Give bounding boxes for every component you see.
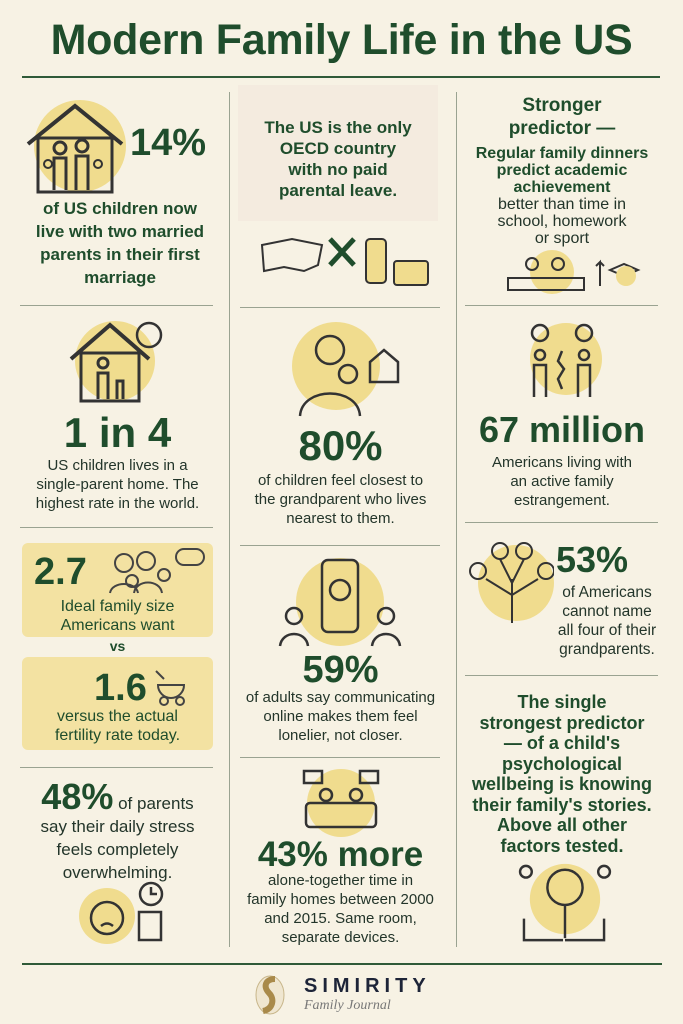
panel: family stories bbox=[472, 692, 652, 942]
text: highest rate in the world. bbox=[36, 495, 199, 512]
stat: 67 million bbox=[479, 409, 645, 450]
heading bbox=[509, 95, 616, 139]
text bbox=[264, 118, 412, 200]
text: alone-together time in bbox=[268, 872, 413, 889]
panel: 48% bbox=[40, 776, 194, 944]
panel: 80% bbox=[254, 322, 426, 527]
icon: grandparent bbox=[292, 322, 400, 416]
stat and text: say their daily stress bbox=[40, 817, 194, 836]
stat: 14% bbox=[130, 122, 206, 164]
stat and text: feels completely bbox=[57, 840, 178, 859]
text bbox=[476, 145, 648, 247]
icon: family faces bbox=[109, 548, 205, 594]
heading: predictor — bbox=[509, 118, 615, 139]
text: Americans living with bbox=[492, 454, 632, 471]
icon: house family bbox=[26, 100, 126, 194]
panel: 1.6 bbox=[22, 657, 213, 750]
stat: 59% bbox=[302, 649, 379, 691]
text: or sport bbox=[535, 230, 589, 247]
text: online makes them feel bbox=[263, 708, 418, 725]
title: Modern Family Life in the US bbox=[51, 16, 632, 64]
stat: 43% more bbox=[258, 835, 423, 874]
panel: 53% bbox=[469, 539, 656, 658]
text: Above all other bbox=[497, 815, 627, 835]
text bbox=[492, 454, 632, 509]
text: the grandparent who lives bbox=[255, 491, 426, 508]
text bbox=[247, 872, 434, 946]
text bbox=[246, 689, 435, 744]
text bbox=[558, 584, 656, 658]
panel: family dinners bbox=[476, 95, 648, 294]
text: single-parent home. The bbox=[36, 476, 199, 493]
icon: phone sad bbox=[278, 558, 402, 646]
stat: 53% bbox=[556, 539, 628, 580]
text: better than time in bbox=[498, 196, 626, 213]
stat and text bbox=[40, 776, 194, 882]
panel: 43% more bbox=[247, 769, 434, 946]
panel: 2.7 bbox=[22, 543, 213, 637]
icon: sofa devices bbox=[302, 769, 380, 837]
subtitle: Family Journal bbox=[304, 998, 391, 1013]
text: — of a child's bbox=[504, 733, 620, 753]
text bbox=[36, 457, 199, 512]
text: The US is the only bbox=[264, 118, 412, 137]
stat and text: 48% of parents bbox=[41, 776, 194, 817]
text bbox=[36, 199, 204, 287]
icon: estrangement bbox=[530, 323, 602, 397]
icon: S logo bbox=[256, 976, 284, 1014]
text: cannot name bbox=[562, 603, 652, 620]
text bbox=[55, 708, 180, 744]
text: grandparents. bbox=[559, 641, 655, 658]
text: marriage bbox=[84, 268, 156, 287]
text: factors tested. bbox=[500, 836, 624, 856]
text bbox=[254, 472, 426, 527]
text: of adults say communicating bbox=[246, 689, 435, 706]
text: and 2015. Same room, bbox=[264, 910, 417, 927]
text: nearest to them. bbox=[286, 510, 395, 527]
text bbox=[472, 692, 652, 856]
stat: 80% bbox=[298, 422, 383, 469]
text: fertility rate today. bbox=[55, 727, 180, 744]
text: school, homework bbox=[498, 213, 626, 230]
text bbox=[60, 598, 174, 634]
stat: 1 in 4 bbox=[64, 409, 171, 456]
vs: vs bbox=[110, 638, 125, 654]
text: Americans want bbox=[61, 617, 174, 634]
text: Ideal family size bbox=[61, 598, 174, 615]
text: of Americans bbox=[562, 584, 652, 601]
text: parental leave. bbox=[279, 181, 397, 200]
text: Regular family dinners bbox=[476, 145, 648, 162]
text: of US children now bbox=[43, 199, 197, 218]
brand name: SIMIRITY bbox=[304, 975, 431, 997]
text: psychological bbox=[502, 754, 622, 774]
panel: 1 in 4 bbox=[36, 321, 199, 512]
stat: 2.7 bbox=[34, 551, 87, 593]
text: of children feel closest to bbox=[258, 472, 423, 489]
icon: stressed face bbox=[79, 882, 164, 944]
text: strongest predictor bbox=[479, 712, 645, 732]
stat: 1.6 bbox=[94, 667, 147, 709]
icon: book tree bbox=[518, 864, 612, 942]
text: US children lives in a bbox=[47, 457, 188, 474]
text: estrangement. bbox=[514, 492, 610, 509]
text: all four of their bbox=[558, 622, 656, 639]
text: with no paid bbox=[288, 160, 388, 179]
panel: 67 million bbox=[479, 323, 645, 509]
text: achievement bbox=[514, 179, 610, 196]
text: OECD country bbox=[280, 139, 396, 158]
text: an active family bbox=[510, 473, 614, 490]
footer: logo bbox=[256, 975, 431, 1014]
panel: 14% bbox=[26, 100, 206, 287]
stat and text: overwhelming. bbox=[63, 863, 172, 882]
panel: 59% bbox=[246, 558, 435, 744]
icon: stroller bbox=[155, 670, 185, 706]
icon: family tree bbox=[469, 542, 554, 623]
icon: map x bottle briefcase bbox=[260, 237, 429, 286]
text: wellbeing is knowing bbox=[472, 774, 652, 794]
text: versus the actual bbox=[57, 708, 178, 725]
text: lonelier, not closer. bbox=[278, 727, 403, 744]
text: The single bbox=[517, 692, 606, 712]
text: predict academic bbox=[497, 162, 627, 179]
text: separate devices. bbox=[282, 929, 399, 946]
text: parents in their first bbox=[40, 245, 200, 264]
text: live with two married bbox=[36, 222, 204, 241]
panel: paid leave bbox=[260, 118, 429, 286]
heading: Stronger bbox=[522, 95, 602, 116]
text: family homes between 2000 bbox=[247, 891, 434, 908]
text: their family's stories. bbox=[472, 794, 652, 814]
icon: dinner table bbox=[507, 250, 640, 294]
icon: single parent house bbox=[70, 321, 162, 402]
